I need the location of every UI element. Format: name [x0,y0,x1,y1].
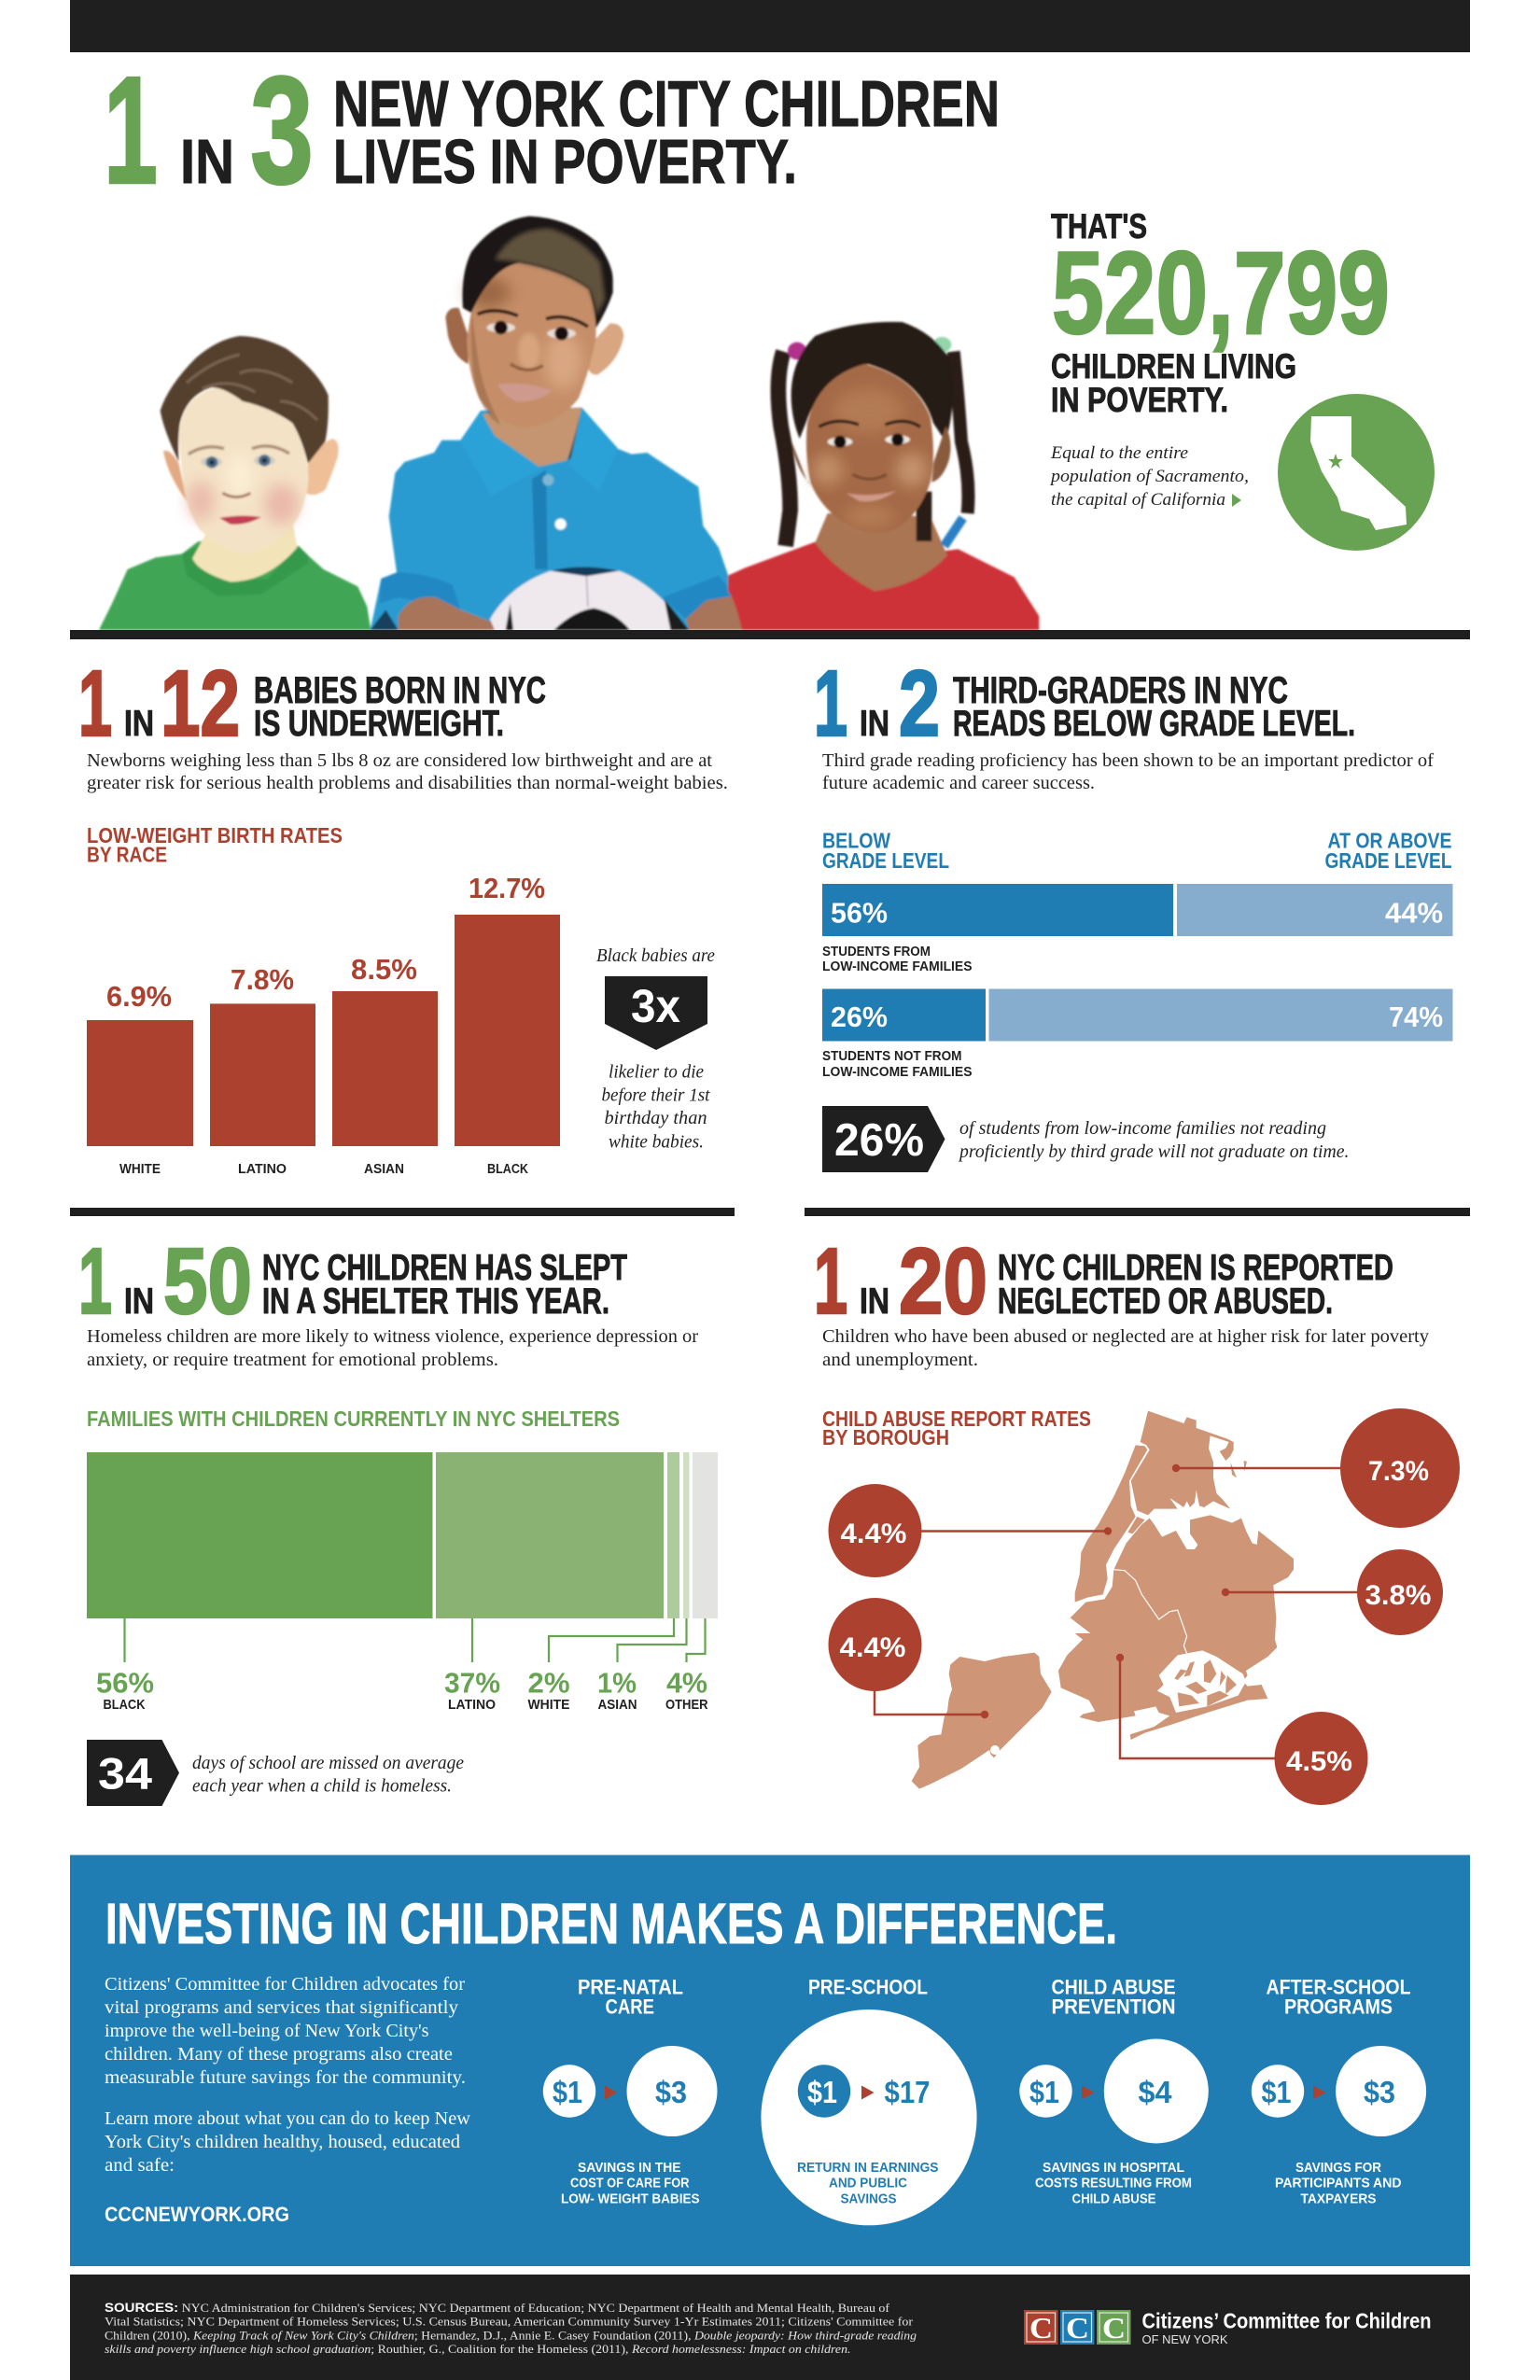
program: pre-natal care: $1 [553,2075,582,2109]
borough rate: Queens [1357,1549,1443,1635]
child in red shirt with braids [728,322,1039,630]
body text [822,1327,1429,1370]
callout: 520,799 children: CHILDREN LIVING [1051,347,1296,385]
callout: 26% will not graduate [822,1106,1350,1172]
child in green shirt [99,336,371,630]
child in blue shirt with soccer ball [371,217,742,630]
photo: three children [99,217,1039,630]
heading: 1 in 12: BABIES BORN IN NYC [254,670,546,711]
logo: CCC blocks: C [1066,2311,1089,2345]
main title: 1 [104,45,158,216]
panel: investing in children [70,1855,1470,2266]
chart values and labels: WHITE [528,1697,569,1713]
chart values and labels: 2% [528,1667,569,1699]
bar chart: birth rates: ASIAN [364,1162,404,1177]
main title: 3 [250,45,314,216]
body text: Children who have been abused or neglected are at higher risk for later poverty [822,1327,1429,1347]
heading: 1 in 2: 2 [899,651,940,756]
borough rate: Bronx: 7.3% [1368,1456,1429,1487]
stacked bar: low-income students: 44% [1385,896,1443,930]
chart values and labels [96,1667,708,1713]
callout: 520,799 children: Equal to the entire [1050,444,1188,463]
organization name: Citizens’ Committee for Children [1142,2309,1432,2333]
panel: low birthweight [78,651,728,1177]
footer [70,2275,1470,2380]
chart values and labels: BLACK [103,1697,146,1713]
bar chart: birth rates: 8.5% [351,953,417,986]
chart values and labels: 1% [597,1667,637,1699]
program: child abuse prevention: $1 [1029,2075,1059,2109]
sources: Children (2010), Keeping Track of New York City's Children ; Hernandez, D.J., Annie E. Casey Foundation (2011), Double jeopardy: How third-grade reading [105,2328,917,2343]
callout: 34 days missed: each year when a child is homeless. [192,1777,452,1796]
callout: 520,799 children: IN POVERTY. [1051,381,1228,419]
body text [822,751,1435,793]
stacked bar: low-income students: 56% [831,896,888,930]
panel: homelessness [78,1229,718,1806]
intro text: vital programs and services that significantly [105,1998,458,2018]
divider bar right [805,1208,1470,1216]
callout: 520,799 children: 520,799 [1052,229,1390,358]
map title [822,1407,1091,1449]
map: NYC boroughs [912,1411,1294,1789]
chart values and labels: OTHER [665,1697,708,1713]
body text [87,751,728,793]
program: pre-school [761,1975,977,2225]
sources: Vital Statistics; NYC Department of Homeless Services; U.S. Census Bureau, American Community Survey 1-Yr Estimates 2011; Citizens' Committee for [105,2315,914,2328]
divider bar left [70,1208,735,1216]
program: pre-natal care [543,1975,717,2206]
logo: CCC blocks [1024,2310,1131,2345]
callout: 34 days missed [87,1740,464,1806]
program: after-school programs: $1 [1262,2075,1292,2109]
logo: CCC blocks: C [1102,2311,1126,2345]
callout: 34 days missed: 34 [98,1749,152,1798]
chart values and labels: 56% [96,1667,154,1699]
callout: 3x likelier: white babies. [609,1133,704,1152]
program: child abuse prevention: COSTS RESULTING FROM [1035,2175,1192,2191]
heading: 1 in 50: 1 [78,1229,112,1334]
stacked bar: low-income students: STUDENTS FROM [822,945,931,959]
borough rate: Brooklyn: 4.5% [1286,1746,1352,1777]
body text: future academic and career success. [822,774,1095,793]
heading: 1 in 50: IN A SHELTER THIS YEAR. [262,1281,609,1322]
bar chart: birth rates: 12.7% [469,872,545,904]
callout: 520,799 children: THAT'S [1051,207,1147,245]
program: pre-school: RETURN IN EARNINGS [797,2160,939,2176]
map title: BY BOROUGH [822,1425,949,1449]
icon: California in green circle [1278,394,1435,551]
borough rate: Manhattan: 4.4% [840,1519,907,1549]
callout: 3x likelier [596,946,715,1152]
program: after-school programs: PARTICIPANTS AND [1275,2175,1402,2191]
sources: skills and poverty influence high school graduation ; Routhier, G., Coalition for the Homeless (2011), Record homelessness: Impact on children. [105,2342,851,2356]
intro text: improve the well-being of New York City's [105,2022,429,2041]
sources: SOURCES: NYC Administration for Children's Services; NYC Department of Education; NYC Department of Health and Mental Health, Bureau of [105,2300,890,2315]
stacked bar: not low-income students: 26% [831,1001,888,1033]
heading: 1 in 2: 1 [814,651,847,756]
borough rate: Staten Island: 4.4% [840,1632,905,1663]
leader lines [125,1618,706,1662]
program: pre-school: PRE-SCHOOL [808,1975,928,1999]
chart title: FAMILIES WITH CHILDREN CURRENTLY IN NYC SHELTERS [87,1407,620,1431]
chart title: BY RACE [87,842,167,866]
stacked bar: not low-income students: STUDENTS NOT FROM [822,1049,961,1064]
chart legend headings: AT OR ABOVE [1327,829,1452,853]
heading: 1 in 2 [814,651,1355,756]
program: after-school programs [1252,1975,1426,2206]
heading: 1 in 2: READS BELOW GRADE LEVEL. [953,704,1355,744]
body text: Homeless children are more likely to witness violence, experience depression or [87,1327,699,1347]
heading: 1 in 2: THIRD-GRADERS IN NYC [953,670,1288,711]
body text: greater risk for serious health problems and disabilities than normal-weight babies. [87,774,728,793]
stacked bar: not low-income students [822,989,1452,1080]
heading: 1 in 12: IN [124,704,154,744]
website: CCCNEWYORK.ORG [105,2203,289,2226]
bar chart: birth rates: 6.9% [106,980,172,1013]
stacked bar: low-income students: LOW-INCOME FAMILIES [822,959,973,974]
body text: Third grade reading proficiency has been shown to be an important predictor of [822,751,1435,771]
program: pre-natal care: PRE-NATAL [578,1975,683,1999]
heading: 1 in 20 [814,1229,1393,1334]
body text [87,1327,699,1370]
chart values and labels: LATINO [448,1697,496,1713]
body text: anxiety, or require treatment for emotional problems. [87,1351,498,1370]
borough rate: Staten Island [829,1598,922,1691]
chart title: LOW-WEIGHT BIRTH RATES [87,823,343,847]
panel: child abuse [814,1229,1460,1805]
organization name [1142,2309,1432,2346]
heading: 1 in 50: 50 [163,1229,252,1334]
divider bar [70,630,1470,639]
stacked bar: not low-income students: LOW-INCOME FAMILIES [822,1065,973,1080]
heading: 1 in 20: IN [860,1281,889,1322]
borough rate: Manhattan [829,1484,922,1577]
program: after-school programs: TAXPAYERS [1301,2191,1376,2206]
program: child abuse prevention: CHILD ABUSE [1071,2191,1155,2206]
program: child abuse prevention [1019,1975,1209,2206]
callout: 3x likelier: birthday than [605,1109,707,1128]
callout: 26% will not graduate: of students from low-income families not reading [959,1119,1326,1139]
heading: 1 in 50: NYC CHILDREN HAS SLEPT [262,1248,627,1288]
callout: 3x likelier: Black babies are [596,946,715,966]
main title: IN [180,127,234,197]
program: child abuse prevention: SAVINGS IN HOSPITAL [1043,2160,1184,2176]
map dots [981,1464,1229,1718]
program: pre-natal care: LOW- WEIGHT BABIES [561,2191,700,2206]
borough rate: Queens: 3.8% [1365,1580,1432,1611]
panel heading: INVESTING IN CHILDREN MAKES A DIFFERENCE. [105,1892,1117,1955]
program: pre-school: SAVINGS [840,2191,896,2206]
intro text: children. Many of these programs also create [105,2045,453,2065]
borough rate: Brooklyn [1275,1712,1368,1805]
stacked bar: not low-income students: 74% [1389,1001,1443,1033]
program: pre-natal care: $3 [655,2075,687,2109]
bar chart: birth rates: 7.8% [231,963,294,996]
organization name: OF NEW YORK [1142,2332,1228,2346]
chart values and labels: 4% [666,1667,707,1699]
heading: 1 in 2: IN [860,704,889,744]
chart title [87,823,343,866]
heading: 1 in 50 [78,1229,627,1334]
main title [104,45,1000,216]
intro text: and safe: [105,2156,175,2176]
heading: 1 in 12: 12 [161,651,240,756]
heading: 1 in 20: NYC CHILDREN IS REPORTED [998,1248,1393,1288]
callout: 26% will not graduate: proficiently by third grade will not graduate on time. [958,1142,1350,1162]
logo: CCC blocks: C [1029,2311,1053,2345]
main title: LIVES IN POVERTY. [333,127,797,197]
stacked bar: families in shelters [87,1452,718,1618]
bar chart: birth rates: BLACK [487,1162,528,1177]
body text: and unemployment. [822,1351,978,1370]
heading: 1 in 12 [78,651,546,756]
callout: 3x likelier: before their 1st [601,1086,710,1105]
intro text: Learn more about what you can do to keep New [105,2109,470,2129]
program: pre-natal care: CARE [605,1995,654,2018]
callout: 26% will not graduate: 26% [834,1115,924,1166]
callout: 520,799 children: population of Sacramento, [1049,468,1249,486]
bar chart: birth rates: LATINO [238,1162,287,1177]
intro text: measurable future savings for the community. [105,2068,466,2088]
sources [105,2300,917,2356]
body text: Newborns weighing less than 5 lbs 8 oz are considered low birthweight and are at [87,751,713,771]
chart values and labels: 37% [444,1667,500,1699]
callout: 34 days missed: days of school are missed on average [192,1754,464,1773]
top black band [70,0,1470,52]
program: pre-school: $1 [807,2075,837,2109]
map title: CHILD ABUSE REPORT RATES [822,1407,1091,1431]
bar chart: birth rates: WHITE [119,1162,161,1177]
chart values and labels: ASIAN [597,1697,637,1713]
program: child abuse prevention: PREVENTION [1051,1995,1176,2018]
callout: 520,799 children [1049,207,1390,510]
heading: 1 in 50: IN [124,1281,154,1322]
heading: 1 in 20: NEGLECTED OR ABUSED. [998,1281,1333,1322]
intro text [105,1975,470,2176]
program: after-school programs: SAVINGS FOR [1295,2160,1381,2176]
heading: 1 in 12: IS UNDERWEIGHT. [254,704,504,744]
bar chart: birth rates [87,872,560,1177]
intro text: Citizens' Committee for Children advocates for [105,1975,466,1995]
heading: 1 in 20: 20 [899,1229,987,1334]
main title: NEW YORK CITY CHILDREN [333,67,1000,140]
program: child abuse prevention: CHILD ABUSE [1051,1975,1176,1999]
callout: 3x likelier: likelier to die [609,1062,704,1083]
heading: 1 in 20: 1 [814,1229,847,1334]
chart legend headings: GRADE LEVEL [822,848,949,873]
borough rate: Bronx [1340,1408,1460,1528]
callout: 3x likelier: 3x [631,980,680,1032]
stacked bar: low-income students [822,884,1452,974]
map leader lines [875,1468,1363,1758]
callout: 520,799 children: the capital of California [1051,491,1225,510]
program: pre-natal care: COST OF CARE FOR [570,2175,690,2191]
heading: 1 in 12: 1 [78,651,112,756]
chart legend headings: GRADE LEVEL [1325,848,1452,873]
program: pre-school: AND PUBLIC [829,2175,907,2191]
panel: third-grade reading [814,651,1452,1172]
chart legend headings [822,829,1452,873]
chart legend headings: BELOW [822,829,890,853]
program: after-school programs: PROGRAMS [1284,1995,1393,2018]
program: after-school programs: $3 [1364,2075,1395,2109]
intro text: York City's children healthy, housed, educated [105,2133,460,2152]
program: after-school programs: AFTER-SCHOOL [1266,1975,1411,1999]
program: child abuse prevention: $4 [1139,2075,1172,2109]
program: pre-natal care: SAVINGS IN THE [578,2160,681,2176]
program: pre-school: $17 [885,2075,930,2109]
